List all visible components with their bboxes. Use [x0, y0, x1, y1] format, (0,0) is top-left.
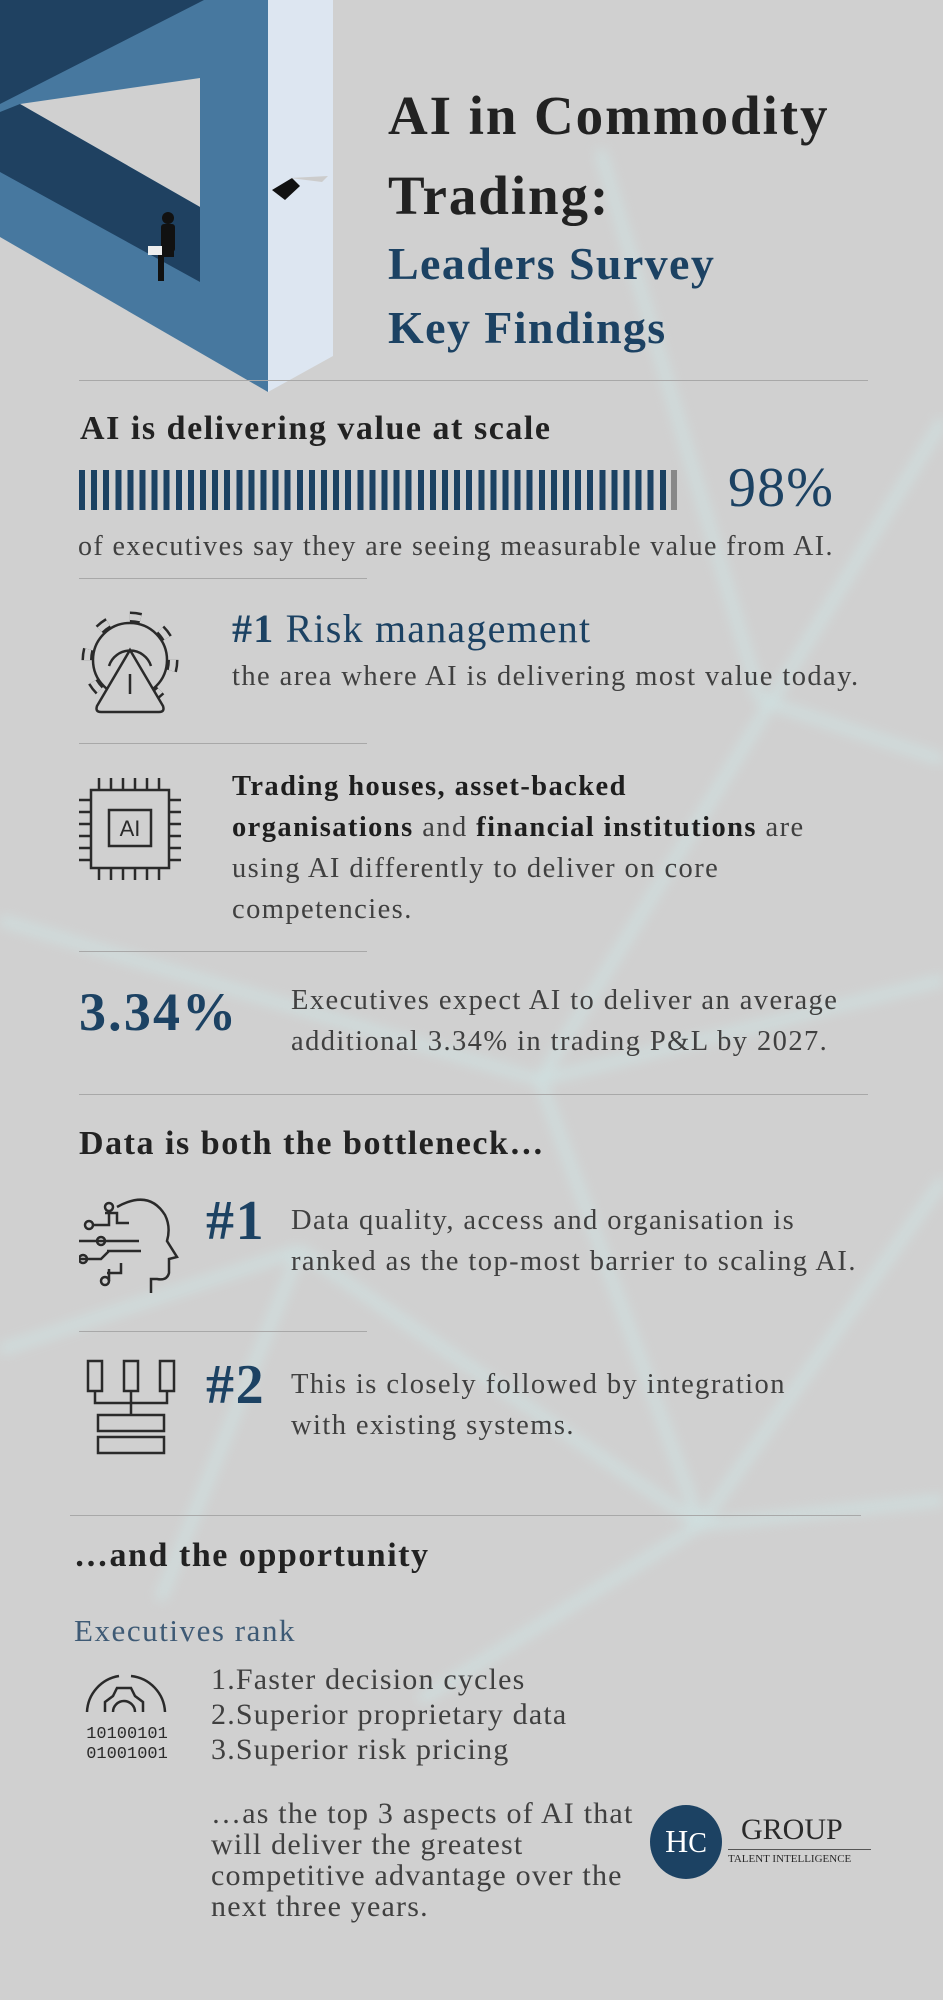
- text: executives rank: Executives rank: [74, 1613, 296, 1648]
- text: trading houses: organisations and financial institutions are: [232, 812, 805, 843]
- stat: #1 data: #1: [206, 1190, 265, 1252]
- stat: 3.34%: 3.34%: [79, 982, 238, 1042]
- text: competitive advantage: next three years.: [211, 1890, 429, 1923]
- figure: person falling: [272, 176, 328, 200]
- icon: gear binary: 10100101: [86, 1725, 168, 1744]
- logo: HC group: TALENT INTELLIGENCE: [728, 1853, 851, 1865]
- text: P&L: additional 3.34% in trading P&L by 2027.: [291, 1026, 828, 1057]
- text: competitive advantage: competitive advantage over the: [211, 1859, 623, 1892]
- list: top 3: 2.Superior proprietary data: [211, 1698, 567, 1731]
- bar chart: 98%: [79, 470, 677, 510]
- title: AI in Commodity: [388, 85, 829, 146]
- text: risk: the area where AI is delivering most value today.: [232, 661, 860, 692]
- stat: 98%: 98%: [728, 457, 834, 519]
- title: Trading:: [388, 165, 610, 226]
- subtitle: Leaders Survey: [388, 238, 715, 289]
- text: integration: [291, 1369, 786, 1441]
- text: trading houses: Trading houses, asset-backed: [232, 771, 627, 802]
- text: P&L: [291, 985, 838, 1057]
- icon: AI chip: [79, 778, 181, 880]
- text: trading houses: competencies.: [232, 894, 413, 925]
- text: data quality: [291, 1205, 857, 1277]
- text: trading houses: using AI differently to deliver on core: [232, 853, 719, 884]
- text: P&L: Executives expect AI to deliver an average: [291, 985, 838, 1016]
- figure: person sitting: [148, 212, 175, 281]
- logo graphic: AI shape: [0, 0, 333, 392]
- icon: gear warning: [82, 612, 178, 714]
- heading: #1 risk management: #1 Risk management: [232, 606, 591, 651]
- subtitle: [388, 238, 715, 353]
- logo: HC group: GROUP: [741, 1813, 843, 1846]
- text: integration: This is closely followed by integration: [291, 1369, 786, 1400]
- heading: opportunity: …and the opportunity: [74, 1537, 430, 1574]
- text: data quality: ranked as the top-most barrier to scaling AI.: [291, 1246, 857, 1277]
- icon: AI chip: AI: [120, 816, 140, 841]
- text: executives value: of executives say they are seeing measurable value from AI.: [78, 531, 834, 562]
- icon: servers: [86, 1360, 176, 1454]
- stat: #2: #2: [206, 1354, 265, 1416]
- icon: gear binary: [86, 1674, 168, 1762]
- logo: HC group: HC: [665, 1823, 707, 1859]
- text: competitive advantage: …as the top 3 aspects of AI that: [211, 1797, 633, 1830]
- text: competitive advantage: [211, 1797, 633, 1923]
- heading: value at scale: AI is delivering value at scale: [80, 410, 551, 447]
- text: competitive advantage: will deliver the greatest: [211, 1828, 523, 1861]
- heading: bottleneck: Data is both the bottleneck…: [79, 1125, 545, 1162]
- subtitle: Key Findings: [388, 302, 667, 353]
- text: integration: with existing systems.: [291, 1410, 575, 1441]
- title: [388, 85, 829, 226]
- list: top 3: [211, 1663, 567, 1766]
- text: data quality: Data quality, access and organisation is: [291, 1205, 795, 1236]
- list: top 3: 1.Faster decision cycles: [211, 1663, 526, 1696]
- icon: head circuit: [79, 1198, 179, 1293]
- logo: HC group: [650, 1805, 871, 1879]
- list: top 3: 3.Superior risk pricing: [211, 1733, 509, 1766]
- text: trading houses: [232, 771, 805, 925]
